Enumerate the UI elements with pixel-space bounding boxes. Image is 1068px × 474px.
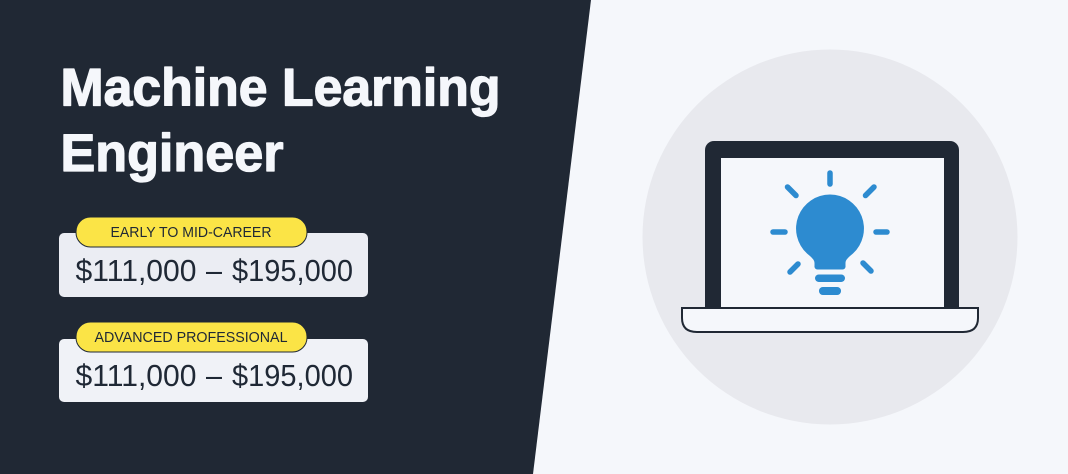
career level pill: EARLY TO MID-CAREER: [110, 224, 272, 241]
career level pill: [76, 322, 307, 352]
salary range: [76, 358, 353, 393]
salary range: –: [206, 358, 223, 393]
title: Machine Learning: [60, 58, 500, 118]
laptop screen: [705, 141, 959, 310]
salary card: advanced professional: [59, 322, 368, 402]
title: [60, 58, 500, 183]
salary range: $111,000: [76, 358, 196, 393]
salary card: early to mid-career: [59, 217, 368, 297]
light rays: [773, 173, 887, 272]
title: Engineer: [60, 124, 284, 183]
icon: laptop: [682, 141, 978, 332]
illustration circle: [642, 50, 1018, 424]
salary range: [76, 253, 353, 288]
career level pill: ADVANCED PROFESSIONAL: [94, 329, 288, 346]
bulb: [796, 194, 864, 270]
icon: light bulb: [773, 173, 887, 295]
salary range: –: [206, 253, 223, 288]
laptop base: [682, 308, 978, 332]
salary range: $195,000: [232, 358, 353, 393]
panel: dark diagonal: [0, 0, 591, 474]
salary range: $195,000: [232, 253, 353, 288]
salary range: $111,000: [76, 253, 196, 288]
bulb base bars: [815, 274, 845, 282]
career level pill: [76, 217, 307, 247]
